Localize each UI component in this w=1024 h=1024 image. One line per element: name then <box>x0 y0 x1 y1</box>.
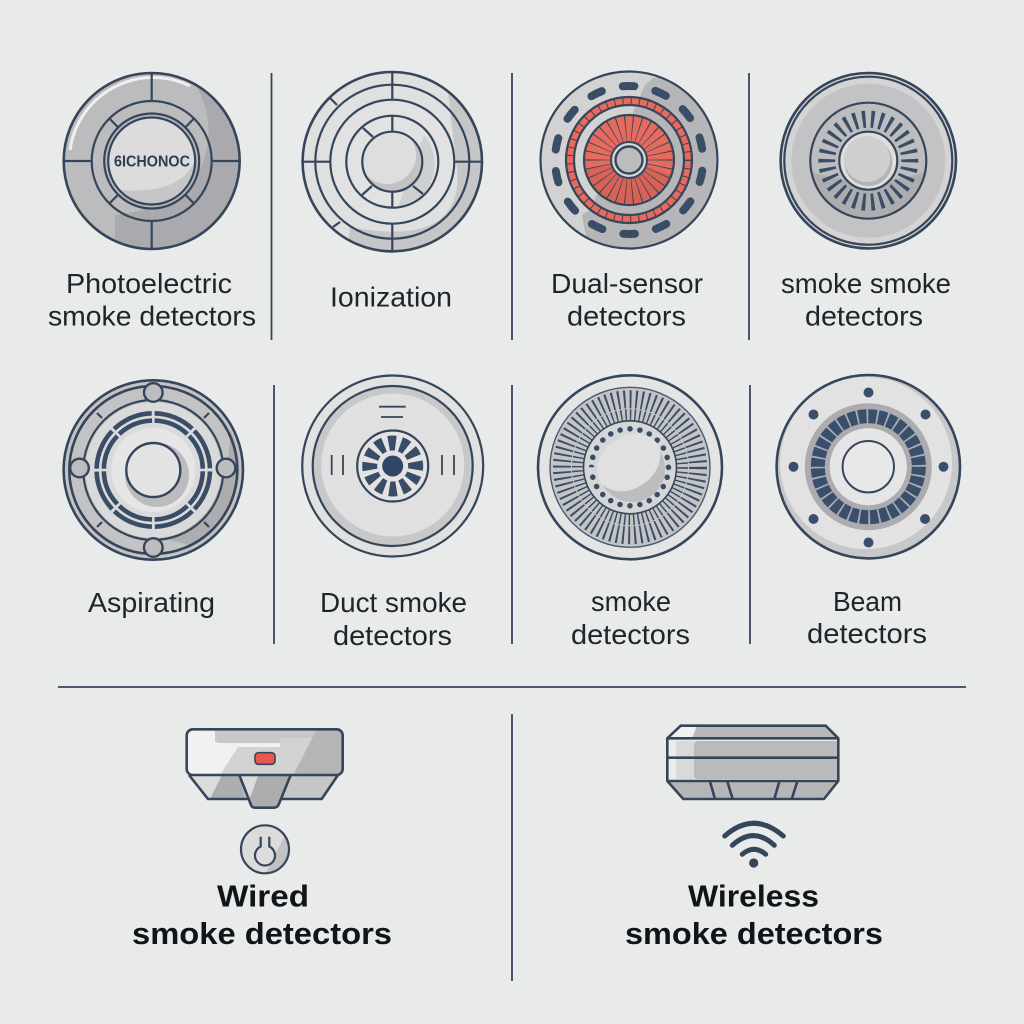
panel: wired smoke detectors <box>132 729 392 951</box>
icon: duct detector <box>302 376 483 556</box>
label: dual-sensor: Dual-sensor <box>551 268 703 299</box>
label: smoke detectors: smoke <box>591 586 671 617</box>
panel: dual-sensor <box>539 70 719 326</box>
label: dual-sensor: detectors <box>567 301 686 332</box>
red sensor disc <box>584 115 674 205</box>
icon: wired detector housing <box>187 729 344 808</box>
label: aspirating: Aspirating <box>88 587 215 618</box>
icon: beam detector <box>777 375 960 558</box>
label: smoke smoke <box>781 268 951 332</box>
panel: photoelectric smoke detectors <box>48 70 256 332</box>
icon: photoelectric detector <box>64 70 247 250</box>
icon: louvred detector <box>538 375 722 559</box>
label: wired: smoke detectors <box>132 916 392 951</box>
radial vent slots <box>827 119 910 202</box>
mounting screws <box>788 388 948 548</box>
icon: dual-sensor detector <box>539 70 719 250</box>
label: photoelectric: smoke detectors <box>48 301 256 332</box>
dome <box>599 436 665 502</box>
label: wireless: smoke detectors <box>625 916 883 951</box>
radial louvres <box>562 399 698 535</box>
panel: beam detectors <box>777 375 960 649</box>
label: smoke detectors: detectors <box>571 619 690 650</box>
tile ring <box>818 416 919 517</box>
label: duct smoke: detectors <box>333 620 452 651</box>
label: wireless <box>625 879 883 951</box>
panel: aspirating <box>64 380 243 618</box>
column and row dividers <box>58 73 966 981</box>
label: smoke detectors <box>571 586 690 650</box>
icon: wifi symbol <box>725 823 783 868</box>
label: photoelectric <box>48 268 256 332</box>
dot ring <box>592 429 668 506</box>
red status LED <box>255 753 275 764</box>
label: photoelectric: Photoelectric <box>66 268 232 299</box>
icon: aspirating detector <box>64 380 243 560</box>
panel: smoke detectors (louvred) <box>538 375 722 650</box>
red outer tile ring <box>570 101 688 219</box>
label: duct smoke: Duct smoke <box>320 587 467 618</box>
label: beam detectors: detectors <box>807 618 927 649</box>
label: wireless: Wireless <box>688 879 819 914</box>
icon: power plug <box>241 825 290 880</box>
central sensor <box>126 443 180 497</box>
icon: wireless detector housing <box>667 726 839 799</box>
label: wired <box>132 879 392 951</box>
label: beam detectors: Beam <box>833 586 902 617</box>
panel: wireless smoke detectors <box>625 726 883 951</box>
label: smoke smoke: detectors <box>805 301 923 332</box>
label: wired: Wired <box>217 879 309 914</box>
panel: smoke smoke <box>781 73 956 332</box>
vent pills <box>555 86 703 234</box>
panel: duct smoke <box>302 376 483 651</box>
label: dual-sensor <box>551 268 703 332</box>
icon: ionization detector <box>303 72 490 260</box>
panel: ionization <box>303 72 490 313</box>
label: beam detectors <box>807 586 927 649</box>
label: duct smoke <box>320 587 467 651</box>
four mounting lugs <box>70 383 235 557</box>
label: smoke smoke: smoke smoke <box>781 268 951 299</box>
radial vents <box>370 443 416 489</box>
label: ionization: Ionization <box>330 282 452 313</box>
segmented navy vents <box>97 413 210 527</box>
icon: vented detector <box>781 73 956 248</box>
device label: 6ICHONOC <box>114 154 190 170</box>
